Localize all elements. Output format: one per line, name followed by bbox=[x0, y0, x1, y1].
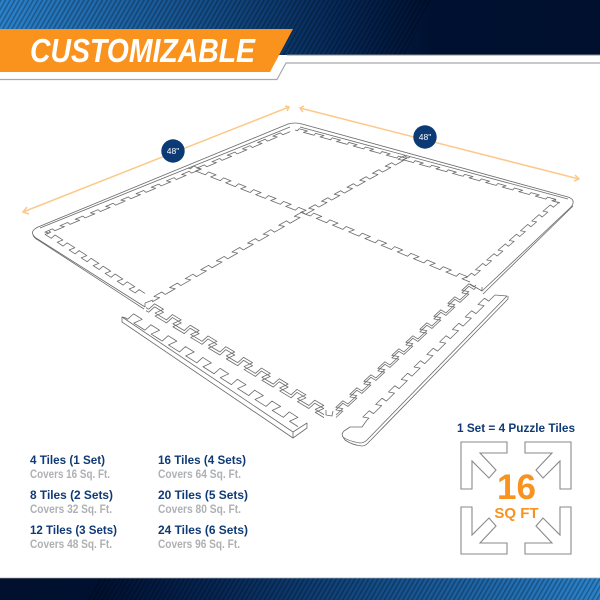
icon: outward corner arrows bbox=[461, 442, 571, 554]
title ribbon: CUSTOMIZABLE bbox=[30, 32, 256, 69]
header banner bbox=[0, 0, 600, 80]
detached left border strip bbox=[122, 313, 307, 438]
tile seams bbox=[147, 155, 474, 302]
area figure: SQ FT bbox=[494, 505, 539, 522]
coverage column two: Covers 64 Sq. Ft. bbox=[158, 469, 241, 481]
coverage column two bbox=[158, 453, 248, 551]
coverage column one: Covers 32 Sq. Ft. bbox=[30, 504, 112, 516]
coverage column one: Covers 16 Sq. Ft. bbox=[30, 469, 110, 481]
footer band bbox=[0, 578, 600, 600]
coverage column one: 8 Tiles (2 Sets) bbox=[30, 488, 113, 502]
coverage column one: 4 Tiles (1 Set) bbox=[30, 453, 105, 467]
coverage column one: Covers 48 Sq. Ft. bbox=[30, 539, 112, 551]
coverage column one: 12 Tiles (3 Sets) bbox=[30, 523, 117, 537]
coverage column one bbox=[30, 453, 117, 551]
coverage column two: Covers 96 Sq. Ft. bbox=[158, 539, 240, 551]
detached right border strip bbox=[342, 293, 508, 446]
area figure bbox=[494, 468, 539, 522]
coverage column two: 24 Tiles (6 Sets) bbox=[158, 523, 248, 537]
dimension arrow: left 48 inches: 48" bbox=[167, 146, 179, 156]
mat outer edge bbox=[32, 123, 573, 307]
coverage list bbox=[30, 453, 248, 551]
lower right open edge bbox=[330, 283, 476, 418]
dimension arrow: left 48 inches bbox=[23, 106, 289, 214]
mat inner edge lines bbox=[33, 127, 573, 309]
coverage column two: Covers 80 Sq. Ft. bbox=[158, 504, 241, 516]
coverage column two: 16 Tiles (4 Sets) bbox=[158, 453, 246, 467]
dimension arrow: right 48 inches bbox=[300, 106, 579, 181]
border teeth bbox=[44, 128, 563, 296]
set size callout bbox=[457, 421, 575, 554]
dimension arrow: right 48 inches: 48" bbox=[419, 132, 431, 142]
coverage column two: 20 Tiles (5 Sets) bbox=[158, 488, 248, 502]
assembled puzzle mat bbox=[32, 123, 573, 418]
lower left open edge bbox=[146, 303, 333, 418]
callout heading: 1 Set = 4 Puzzle Tiles bbox=[457, 421, 575, 435]
area figure: 16 bbox=[497, 468, 536, 507]
